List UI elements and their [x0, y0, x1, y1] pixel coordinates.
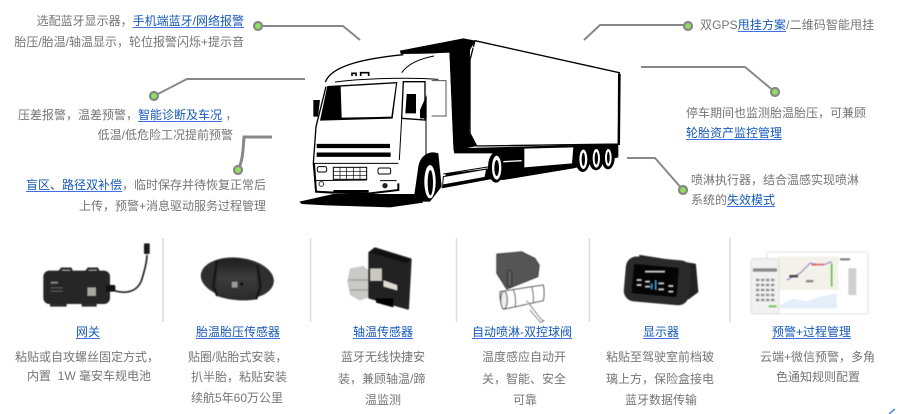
text: dual compensation: 上传，预警+消息驱动服务过程管理: [79, 199, 266, 213]
panel: tire sensor: 扒半胎，粘贴安装: [191, 370, 287, 384]
text: dual compensation: [26, 178, 266, 213]
panel: alarm and process management: 色通知规则配置: [776, 370, 860, 384]
mirror: [313, 100, 320, 117]
panel: tire sensor: 贴圈/贴胎式安装，: [188, 350, 287, 364]
panel: display: 璃上方，保险盒接电: [606, 372, 714, 386]
text: parking monitor: 停车期间也监测胎温胎压，可兼顾: [686, 106, 866, 120]
panel: spray valve: 温度感应自动开: [482, 350, 566, 364]
panel: gateway: 粘贴或自攻螺丝固定方式，: [15, 350, 159, 364]
panel: tire sensor: 胎温胎压传感器: [196, 325, 280, 339]
panel: display: [606, 325, 714, 407]
trailer side box: [524, 147, 573, 167]
text: dual compensation: 盲区、路径双补偿，临时保存并待恢复正常后: [26, 178, 266, 192]
cab body: [313, 53, 455, 193]
panel: display: 蓝牙数据传输: [625, 393, 697, 407]
panel: axle sensor: 装，兼顾轴温/蹄: [338, 372, 425, 386]
text: spray actuator: [691, 173, 859, 207]
text: mobile bluetooth alarm: [14, 14, 244, 49]
cab step: [443, 153, 493, 174]
panel: axle sensor: 温监测: [365, 393, 401, 407]
text: smart diagnosis: 低温/低危险工况提前预警: [98, 128, 233, 142]
cab outline: [313, 87, 370, 193]
text: spray actuator: 系统的失效模式: [691, 193, 775, 207]
panel: axle sensor: 蓝牙无线快捷安: [341, 350, 425, 364]
text: parking monitor: [686, 106, 866, 140]
cab top lights: [352, 73, 369, 76]
text: smart diagnosis: [18, 108, 237, 142]
panel: alarm and process management: [760, 325, 875, 384]
panel: spray valve: 关，智能、安全: [482, 372, 566, 386]
text: smart diagnosis: 压差报警，温差预警，智能诊断及车况 ，: [18, 108, 237, 122]
panel: spray valve: [472, 325, 572, 407]
connector: smart diagnosis: [150, 79, 305, 100]
text: mobile bluetooth alarm: 选配蓝牙显示器，手机端蓝牙/网络报警: [37, 14, 244, 28]
chassis shadow: [442, 144, 618, 188]
connector: dual GPS: [584, 22, 692, 40]
grille bars: [317, 146, 391, 155]
windscreen: [320, 82, 397, 121]
trailer body: [470, 41, 619, 146]
panel: display: 粘贴至驾驶室前档玻: [606, 350, 714, 364]
text: mobile bluetooth alarm: 胎压/胎温/轴温显示，轮位报警闪烁+提示音: [14, 35, 244, 49]
panel: alarm and process management: 预警+过程管理: [772, 325, 851, 339]
panel: gateway: [15, 325, 159, 383]
text: dual GPS: 双GPS甩挂方案/二维码智能甩挂: [700, 18, 874, 32]
panel: tire sensor: 续航5年60万公里: [191, 391, 283, 405]
rear tractor wheel: [488, 152, 504, 183]
connector: mobile bluetooth alarm: [254, 22, 360, 40]
bumper: [314, 163, 398, 193]
text: spray actuator: 喷淋执行器，结合温感实现喷淋: [691, 173, 859, 187]
ground shadow: [299, 194, 423, 207]
text: parking monitor: 轮胎资产监控管理: [686, 126, 782, 140]
connector: dual compensation: [234, 137, 272, 174]
front wheel arch and wheel: [413, 152, 442, 202]
panel: spray valve: 可靠: [513, 393, 537, 407]
panel: alarm and process management: 云端+微信预警，多角: [760, 350, 875, 364]
panel: spray valve: 自动喷淋-双控球阀: [472, 325, 572, 339]
trailer wheels: [575, 146, 615, 172]
panel: axle sensor: 轴温传感器: [353, 325, 413, 339]
trailer front: [400, 38, 477, 151]
panel: display: 显示器: [643, 325, 679, 339]
door: [402, 82, 425, 120]
panel: tire sensor: [188, 325, 287, 405]
panel: gateway: 网关: [76, 325, 100, 339]
panel: axle sensor: [338, 325, 425, 407]
panel: gateway: 内置 1W 毫安车规电池: [27, 369, 151, 383]
connector: parking monitor: [641, 67, 779, 96]
connector: spray actuator: [627, 158, 687, 194]
